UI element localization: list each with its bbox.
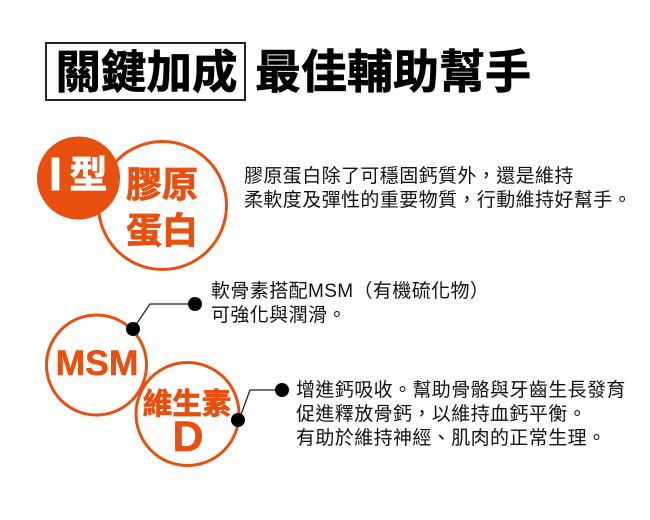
collagen circle bbox=[98, 142, 226, 270]
MSM circle: MSM bbox=[56, 343, 138, 383]
collagen circle: 膠原 bbox=[126, 164, 198, 205]
collagen circle: 蛋白 bbox=[126, 210, 198, 251]
type I badge bbox=[37, 136, 120, 220]
text: vitamin D description: 增進鈣吸收。幫助骨骼與牙齒生長發育 bbox=[296, 380, 626, 401]
MSM circle bbox=[46, 315, 146, 415]
text: vitamin D description: 促進釋放骨鈣，以維持血鈣平衡。 bbox=[296, 404, 587, 425]
text: MSM description: 可強化與潤滑。 bbox=[211, 305, 347, 326]
type I badge: 型 bbox=[69, 155, 108, 197]
connector: vitamin D bbox=[231, 383, 289, 427]
title: boxed heading: 關鍵加成 bbox=[55, 47, 238, 98]
text: vitamin D description bbox=[296, 380, 626, 449]
text: collagen description bbox=[244, 166, 632, 211]
text: collagen description: 膠原蛋白除了可穩固鈣質外，還是維持 bbox=[244, 166, 574, 187]
title bbox=[45, 42, 531, 101]
vitamin D circle: 維生素 bbox=[143, 388, 231, 421]
vitamin D circle bbox=[136, 362, 239, 466]
text: MSM description: 軟骨素搭配MSM（有機硫化物） bbox=[211, 281, 489, 302]
text: MSM description bbox=[211, 280, 489, 326]
title: main heading: 最佳輔助幫手 bbox=[255, 46, 531, 98]
text: collagen description: 柔軟度及彈性的重要物質，行動維持好幫手。 bbox=[244, 190, 632, 211]
text: vitamin D description: 有助於維持神經、肌肉的正常生理。 bbox=[296, 428, 606, 449]
type I badge: I bbox=[49, 148, 62, 200]
vitamin D circle: D bbox=[172, 413, 204, 461]
connector: MSM bbox=[126, 297, 202, 336]
